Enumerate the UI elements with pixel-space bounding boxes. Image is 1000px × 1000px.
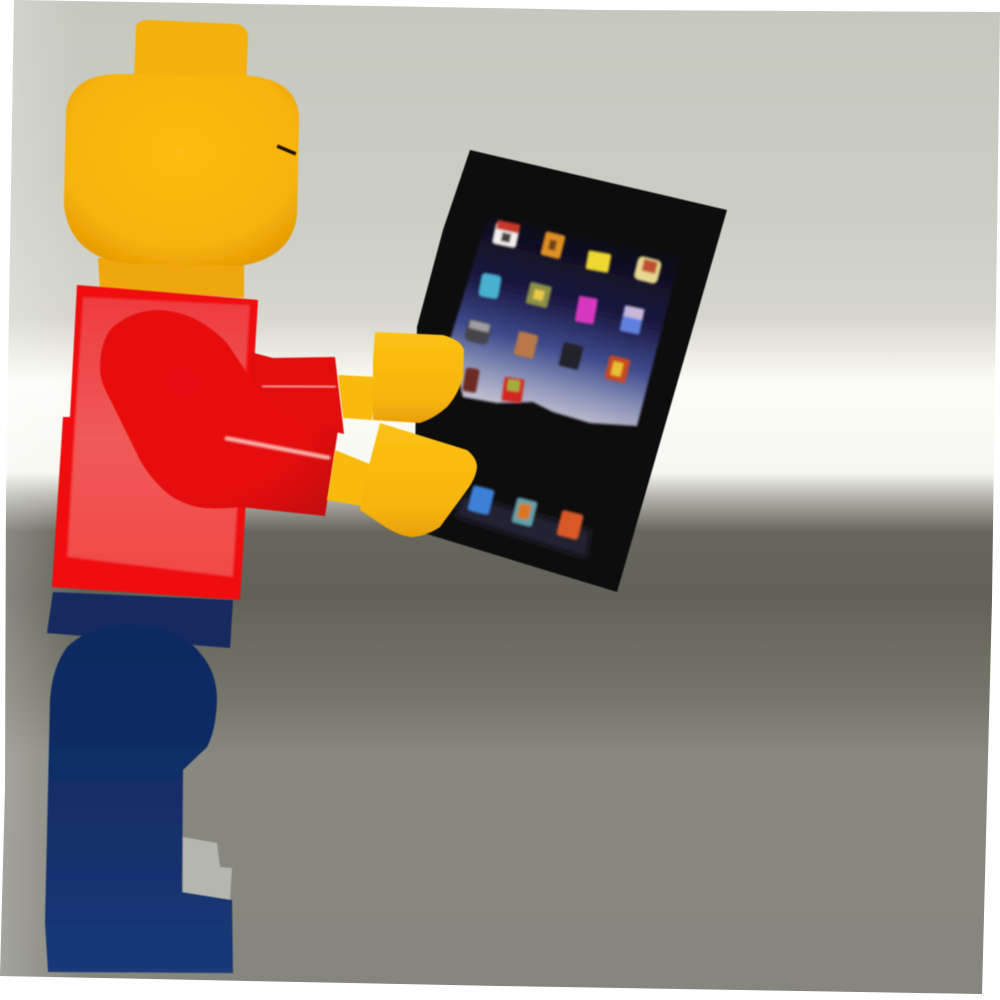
leg: [45, 625, 233, 973]
tablet: [414, 150, 727, 592]
figure: red torso: [52, 285, 258, 600]
dock: [456, 495, 590, 558]
dock icons: [467, 485, 584, 540]
figure: near wrist and hand: [327, 423, 477, 537]
figure: near arm: [100, 310, 338, 516]
figure: far wrist and hand: [338, 332, 464, 423]
hip: [47, 592, 233, 648]
torso pale panel: [67, 297, 250, 577]
far arm highlight: [262, 386, 336, 387]
figure: blue legs: [45, 592, 233, 973]
figure: yellow neck and head: [64, 20, 299, 298]
tablet body: [414, 150, 727, 592]
figure: far arm: [250, 352, 344, 434]
eye: [277, 146, 296, 154]
app icons: [462, 220, 662, 403]
head: [64, 74, 299, 266]
near arm highlight: [225, 438, 330, 458]
neck: [98, 258, 244, 298]
head stud: [134, 20, 248, 84]
foot clip: [183, 837, 232, 900]
tablet screen: [450, 215, 680, 426]
